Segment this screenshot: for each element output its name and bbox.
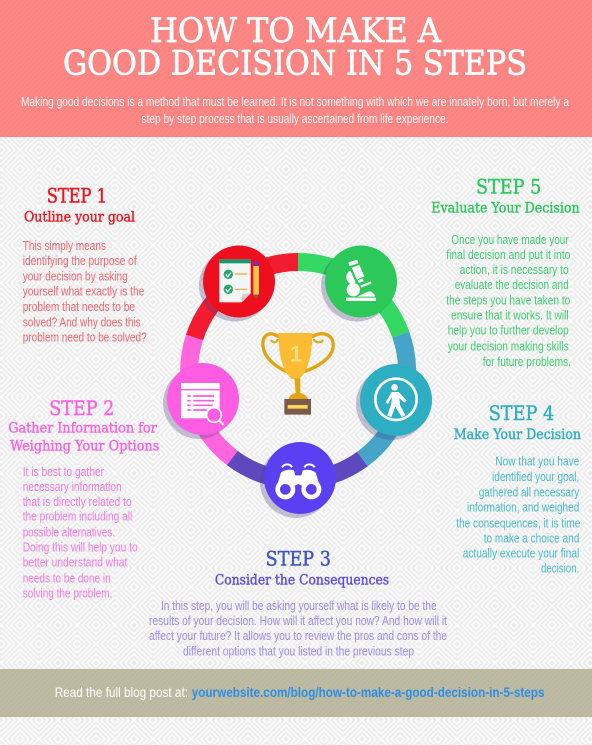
step 2 text: the problem including all xyxy=(23,509,132,524)
title xyxy=(63,11,527,84)
step 4 panel xyxy=(454,401,581,576)
icon: trophy: 1 xyxy=(290,342,302,367)
step 2 heading xyxy=(8,396,159,455)
step 2 text: Doing this will help you to xyxy=(23,540,138,555)
step 2 heading: Gather Information for xyxy=(8,421,157,437)
title: GOOD DECISION IN 5 STEPS xyxy=(63,44,527,84)
step 3 heading: STEP 3 xyxy=(266,547,331,571)
footer link text xyxy=(55,684,545,700)
intro text: step by step process that is usually ascertained from life experience. xyxy=(142,111,448,126)
step 2 text: that is directly related to xyxy=(23,494,132,509)
step 5 panel xyxy=(431,174,580,369)
cycle diagram xyxy=(163,246,432,518)
step 2 text xyxy=(23,464,138,601)
step 3 text: In this step, you will be asking yourself what is likely to be the xyxy=(161,598,437,613)
step 1 text: problem need to be solved? xyxy=(23,330,147,345)
step 2 heading: Weighing Your Options xyxy=(10,439,159,455)
step 1 text: your decision by asking xyxy=(23,268,128,283)
step 5 text xyxy=(446,232,571,369)
step 3 heading xyxy=(215,547,389,588)
step 1 text xyxy=(23,238,147,345)
step 5 heading: Evaluate Your Decision xyxy=(431,201,580,217)
step 4 heading: Make Your Decision xyxy=(454,427,581,443)
step 2 text: better understand what xyxy=(23,555,128,570)
step 1 text: identifying the purpose of xyxy=(23,253,137,268)
step 3 text: different options that you listed in the previous step xyxy=(183,644,414,659)
intro text xyxy=(21,94,570,126)
step 2 text: It is best to gather xyxy=(23,464,105,479)
icon: step 4 pedestrian sign xyxy=(360,364,432,436)
step 2 text: needs to be done in xyxy=(23,571,111,586)
step 3 heading: Consider the Consequences xyxy=(215,572,389,588)
step 2 text: necessary information xyxy=(23,479,122,494)
step 1 heading: Outline your goal xyxy=(24,210,135,226)
icon: step 1 checklist xyxy=(203,246,275,318)
step 2 text: possible alternatives. xyxy=(23,525,115,540)
step 4 heading xyxy=(454,401,581,443)
step 4 heading: STEP 4 xyxy=(489,401,554,425)
step 1 panel xyxy=(23,184,147,345)
step 2 panel xyxy=(8,396,159,601)
icon: step 2 document search xyxy=(167,363,239,435)
step 3 panel xyxy=(149,547,447,659)
header banner xyxy=(0,0,592,137)
step 1 heading xyxy=(24,184,135,226)
title: HOW TO MAKE A xyxy=(150,11,441,51)
step 4 text xyxy=(456,454,580,576)
ring segments xyxy=(189,262,407,480)
step 4 text: decision. xyxy=(541,561,579,576)
step 5 heading xyxy=(431,174,580,217)
icon: trophy xyxy=(263,333,333,415)
footer band xyxy=(0,669,592,717)
icon: step 5 microscope xyxy=(325,246,397,318)
step 1 text: yourself what exactly is the xyxy=(23,284,144,299)
step 1 text: This simply means xyxy=(23,238,106,253)
step 3 text: results of your decision. How will it affect you now? And how will it xyxy=(149,613,447,628)
step 2 text: solving the problem. xyxy=(23,586,112,601)
step 2 heading: STEP 2 xyxy=(49,396,114,420)
step 3 text: affect your future? It allows you to review the pros and cons of the xyxy=(149,628,447,643)
step 5 heading: STEP 5 xyxy=(476,174,541,198)
step 3 text xyxy=(149,598,447,659)
icon: step 3 binoculars xyxy=(264,442,336,514)
step 1 text: problem that needs to be xyxy=(23,299,135,314)
step 1 text: solved? And why does this xyxy=(23,315,141,330)
step 1 heading: STEP 1 xyxy=(47,184,107,208)
circle shadows xyxy=(163,250,428,518)
footer link text: Read the full blog post at: xyxy=(55,684,188,700)
